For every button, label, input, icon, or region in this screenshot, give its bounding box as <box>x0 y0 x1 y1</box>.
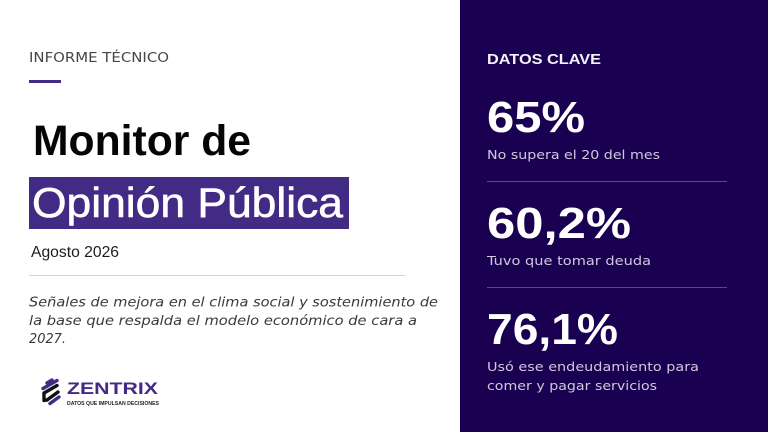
stat: 76,1%: comer y pagar servicios <box>487 378 657 393</box>
stat: 76,1%: 76,1% <box>487 305 618 354</box>
description: la base que respalda el modelo económico de cara a <box>29 313 417 329</box>
divider <box>29 275 405 276</box>
panel heading: DATOS CLAVE <box>487 52 601 68</box>
title: monitor de: Monitor de <box>33 117 251 165</box>
stat: 76,1%: Usó ese endeudamiento para <box>487 359 699 374</box>
title highlight: opinión pública: Opinión Pública <box>32 179 344 226</box>
stat: 65%: No supera el 20 del mes <box>487 147 660 162</box>
stat: 76,1% <box>487 305 699 393</box>
logo: zentrix <box>43 380 159 407</box>
date: Agosto 2026 <box>31 244 119 261</box>
panel: datos clave <box>460 0 768 432</box>
eyebrow: informe técnico: INFORME TÉCNICO <box>29 50 169 66</box>
stat: 60,2%: Tuvo que tomar deuda <box>486 253 651 268</box>
description: Señales de mejora en el clima social y sostenimiento de <box>29 294 438 310</box>
icon: zentrix mark <box>43 380 59 404</box>
stat: 65%: 65% <box>487 93 585 142</box>
accent bar <box>29 80 61 83</box>
stat: 65% <box>487 93 660 162</box>
stat: 60,2%: 60,2% <box>487 199 631 248</box>
tagline: DATOS QUE IMPULSAN DECISIONES <box>67 401 159 407</box>
description <box>29 294 438 347</box>
description: 2027. <box>29 331 66 347</box>
stat: 60,2% <box>486 199 651 268</box>
panel: left cover <box>29 50 438 407</box>
wordmark: ZENTRIX <box>67 380 158 398</box>
